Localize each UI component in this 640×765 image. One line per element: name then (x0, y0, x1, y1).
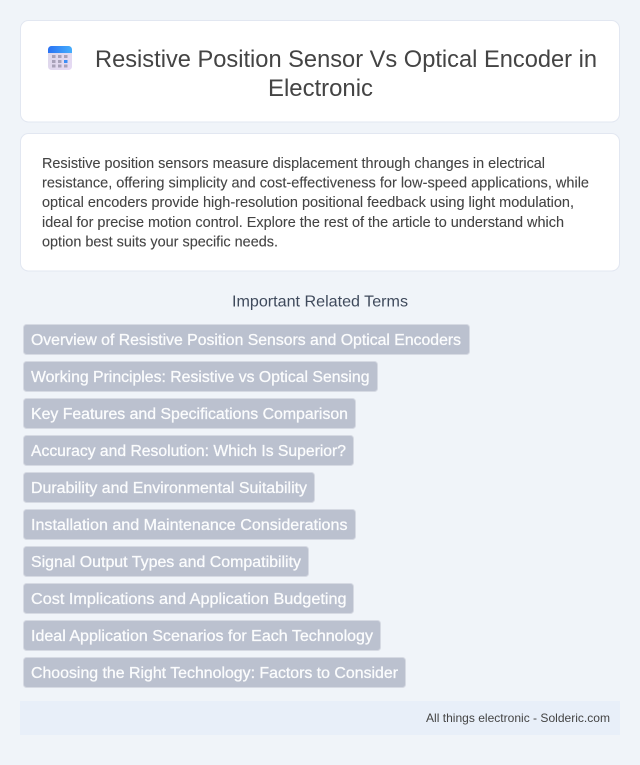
text block: description: resistance, offering simplicity and cost-effectiveness for low-speed applications, while (42, 176, 589, 192)
title: Resistive Position Sensor Vs Optical Encoder in (95, 46, 597, 73)
tag 8 (24, 584, 354, 614)
tag 7 (24, 546, 308, 576)
tag 8: Cost Implications and Application Budgeting (31, 591, 346, 608)
tag 2: Working Principles: Resistive vs Optical Sensing (31, 369, 370, 386)
text block: description (42, 156, 589, 250)
tag 1: Overview of Resistive Position Sensors and Optical Encoders (31, 332, 461, 349)
title: Electronic (268, 75, 373, 102)
list: related term tags (24, 324, 470, 688)
text block: description: Resistive position sensors measure displacement through changes in electrical (42, 156, 545, 172)
tag 10: Choosing the Right Technology: Factors to Consider (31, 665, 399, 682)
tag 6 (24, 510, 356, 540)
tag 5 (24, 472, 314, 502)
tag 5: Durability and Environmental Suitability (31, 480, 307, 497)
footer (20, 701, 620, 735)
text block: description: ideal for precise motion control. Explore the rest of the article to understand which (42, 215, 564, 231)
tag 7: Signal Output Types and Compatibility (31, 554, 301, 571)
panel: title header (20, 20, 620, 122)
tag 3: Key Features and Specifications Comparison (31, 406, 348, 423)
tag 9: Ideal Application Scenarios for Each Technology (31, 628, 373, 645)
tag 4 (24, 436, 354, 466)
text block: description: option best suits your specific needs. (42, 234, 278, 250)
heading: important related terms: Important Related Terms (232, 294, 408, 310)
tag 1 (24, 324, 470, 354)
title (95, 46, 597, 102)
tag 6: Installation and Maintenance Considerations (31, 517, 348, 534)
tag 10 (24, 658, 406, 688)
panel: description (20, 134, 620, 271)
tag 4: Accuracy and Resolution: Which Is Superior? (31, 443, 346, 460)
tag 2 (24, 362, 378, 392)
tag 3 (24, 398, 356, 428)
footer text: All things electronic - Solderic.com (426, 711, 610, 725)
text block: description: optical encoders provide high-resolution positional feedback using light modulation, (42, 195, 574, 211)
icon: calendar (48, 46, 72, 70)
tag 9 (24, 620, 380, 650)
